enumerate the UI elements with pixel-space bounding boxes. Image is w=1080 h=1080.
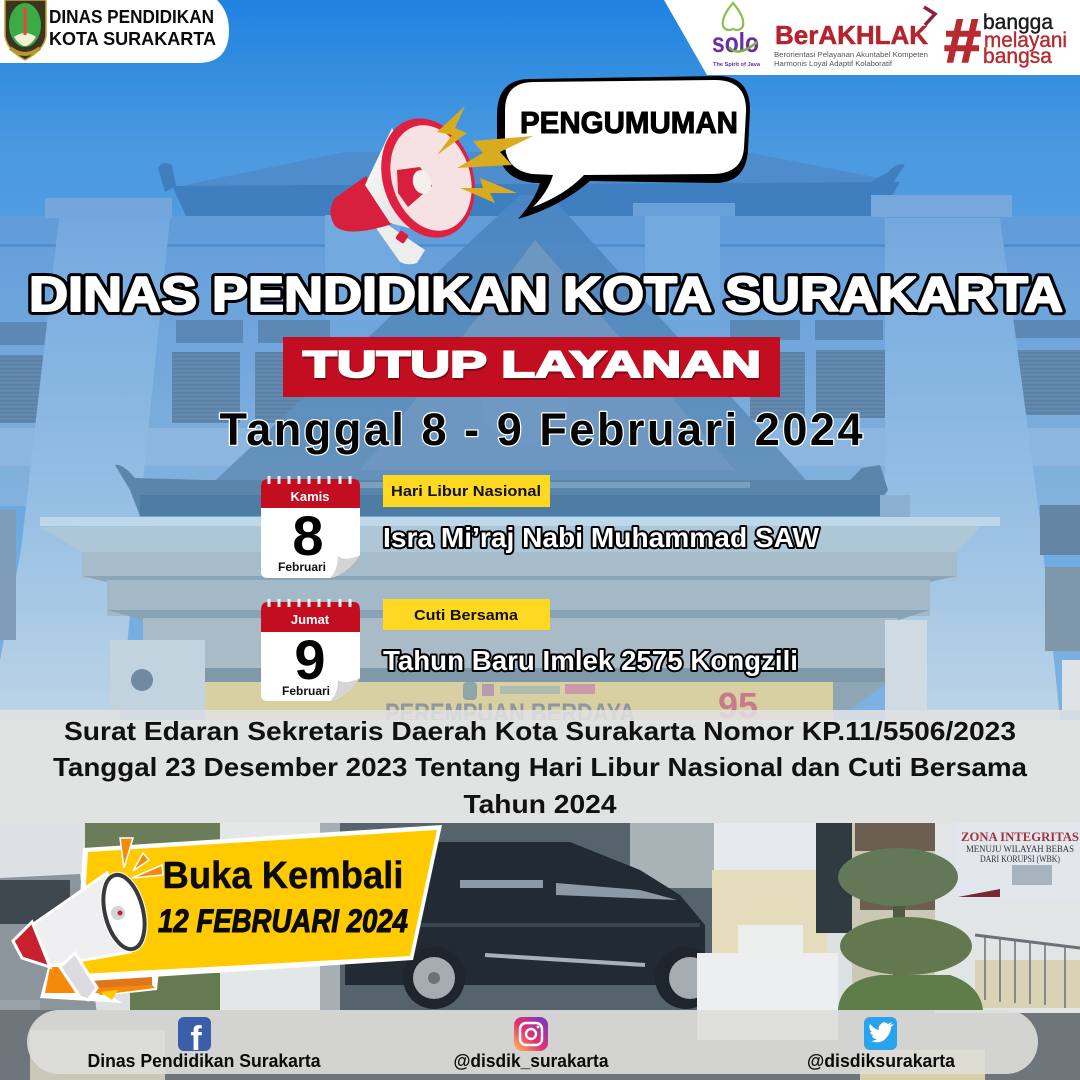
logo: bangga melayani bangsa: bangga — [983, 11, 1053, 34]
heading: Dinas Pendidikan Kota Surakarta: DINAS PENDIDIKAN KOTA SURAKARTA — [29, 268, 1063, 322]
text: decree notice: Tahun 2024 — [464, 789, 617, 819]
logo: bangga melayani bangsa: # — [944, 7, 981, 76]
walls — [0, 216, 1080, 506]
icon: calendar Kamis 8 — [261, 476, 360, 578]
text: PENGUMUMAN: PENGUMUMAN — [520, 105, 738, 140]
text: decree notice — [53, 716, 1028, 819]
heading: Dinas Pendidikan Kota Surakarta: DINAS PENDIDIKAN KOTA SURAKARTA — [29, 268, 1063, 322]
icon: calendar Jumat 9 — [261, 599, 360, 701]
logo: BerAKHLAK: BerAKHLAK — [775, 20, 928, 50]
banner: Tutup Layanan: TUTUP LAYANAN — [304, 346, 762, 387]
windows — [0, 320, 1080, 423]
lower street level — [0, 720, 1080, 1080]
Zona Integritas sign: DARI KORUPSI (WBK) — [980, 854, 1060, 864]
text: reopening date: 12 FEBRUARI 2024 — [158, 903, 408, 939]
logo: BerAKHLAK — [774, 7, 935, 68]
Zona Integritas sign: ZONA INTEGRITAS — [961, 829, 1079, 844]
panel: top-left agency badge: KOTA SURAKARTA — [49, 29, 216, 49]
eave — [115, 465, 888, 516]
text: Buka Kembali: Buka Kembali — [162, 855, 404, 897]
far right lower windows — [1040, 505, 1080, 555]
gable — [205, 195, 815, 490]
label: Cuti Bersama: Cuti Bersama — [414, 607, 519, 624]
icon: instagram — [514, 1017, 548, 1051]
text: Isra Mi'raj: Isra Mi’raj Nabi Muhammad SAW — [383, 522, 820, 553]
icon: calendar Jumat 9: Jumat — [291, 612, 330, 627]
event banner: 95 — [718, 685, 758, 726]
logo: bangga melayani bangsa: bangsa — [983, 45, 1052, 68]
text: Facebook handle: Dinas Pendidikan Surakarta — [88, 1051, 321, 1071]
text: Twitter handle: @disdiksurakarta — [807, 1051, 956, 1071]
logo: BerAKHLAK: Berorientasi Pelayanan Akuntabel Kompeten — [774, 52, 928, 59]
icon: calendar Jumat 9: 9 — [294, 628, 326, 691]
upper roof — [180, 152, 900, 222]
logo: bangga melayani bangsa: melayani — [984, 29, 1067, 52]
icon: twitter — [864, 1017, 897, 1050]
text: date range: Tanggal 8 - 9 Februari 2024 — [220, 404, 862, 455]
panel: top-left agency badge — [0, 0, 229, 63]
pillars — [0, 218, 170, 720]
icon: facebook — [178, 1017, 211, 1058]
pillar — [714, 823, 816, 871]
left car — [0, 874, 100, 1040]
shrubs — [893, 900, 905, 990]
icon: calendar Kamis 8: 8 — [292, 504, 324, 567]
icon: red megaphone with lightning — [330, 106, 533, 264]
callout: reopening sign — [13, 825, 442, 1003]
logo: BerAKHLAK: Harmonis Loyal Adaptif Kolaboratif — [774, 61, 892, 68]
white border and yellow board — [75, 825, 442, 982]
floor — [0, 1010, 1080, 1080]
logo: Solo — [712, 3, 761, 68]
right building base — [816, 823, 852, 933]
text: Tahun Baru Imlek: Tahun Baru Imlek 2575 Kongzili — [383, 645, 798, 676]
logo: Solo: solo — [712, 27, 759, 58]
icon: calendar Jumat 9: Februari — [282, 684, 330, 698]
railing and steps — [975, 960, 1080, 1008]
panel: social media bar — [27, 1010, 1038, 1074]
icon: city crest — [5, 0, 46, 60]
banner: Tutup Layanan: TUTUP LAYANAN — [303, 344, 761, 385]
icon: facebook: f — [190, 1020, 202, 1058]
handle — [376, 225, 425, 264]
panel: decree notice band — [0, 710, 1080, 823]
text: agency name: DINAS PENDIDIKAN — [49, 7, 214, 27]
cone — [365, 128, 438, 236]
Zona Integritas sign — [955, 823, 1080, 899]
label: Cuti Bersama — [383, 599, 550, 630]
rear — [330, 176, 392, 232]
icon: calendar Kamis 8: Februari — [278, 560, 326, 574]
text: Instagram handle: @disdik_surakarta — [454, 1051, 609, 1071]
icon: white megaphone — [13, 871, 152, 1000]
panel: top-right partner logos — [664, 0, 1080, 76]
text: decree notice: Surat Edaran Sekretaris Daerah Kota Surakarta Nomor KP.11/5506/2023 — [64, 716, 1016, 746]
label: Hari Libur Nasional — [383, 475, 550, 507]
garage and dark car — [340, 823, 715, 1010]
canopy — [40, 519, 988, 552]
banner: Tutup Layanan — [283, 337, 780, 397]
logo: Solo: The Spirit of Java — [713, 62, 761, 68]
ribbon — [40, 960, 160, 1003]
icon: calendar Kamis 8: Kamis — [290, 489, 330, 504]
callout: speech bubble heading — [497, 76, 750, 219]
event banner: PEREMPUAN BERDAYA — [385, 698, 635, 728]
label: Hari Libur Nasional: Hari Libur Nasional — [391, 483, 541, 500]
Zona Integritas sign: MENUJU WILAYAH BEBAS — [966, 844, 1074, 854]
logo: bangga melayani bangsa — [944, 7, 1067, 76]
event banner — [205, 682, 833, 732]
text: decree notice: Tanggal 23 Desember 2023 Tentang Hari Libur Nasional dan Cuti Bersama — [53, 752, 1028, 782]
